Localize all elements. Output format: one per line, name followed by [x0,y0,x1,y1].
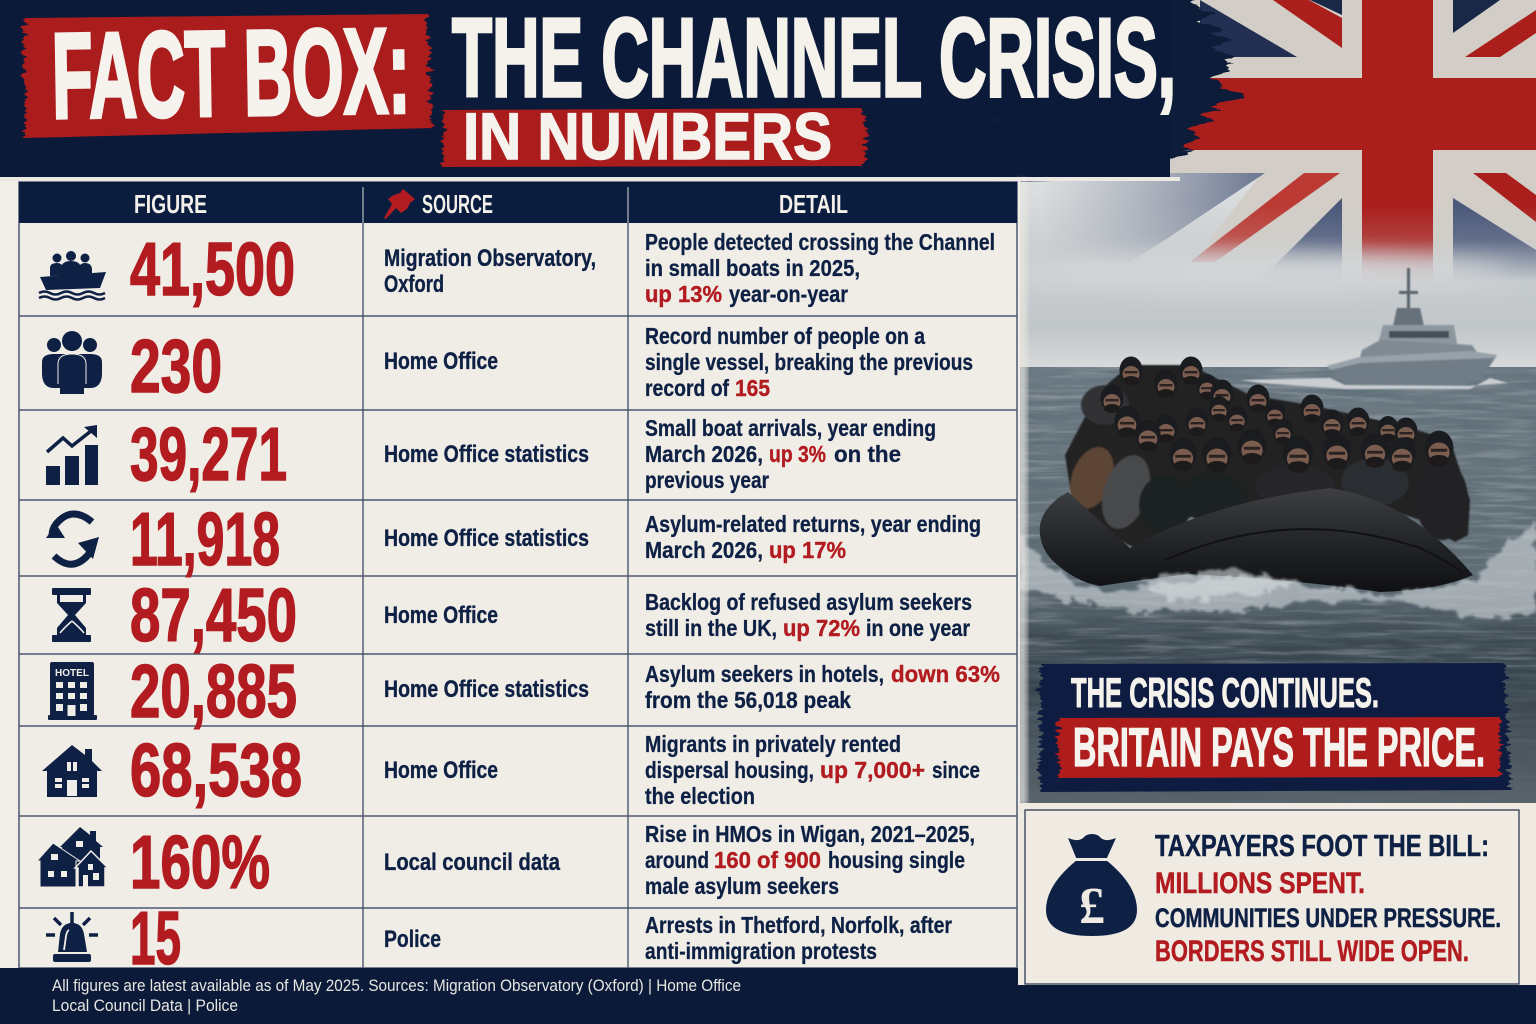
detail: Rise in HMOs in Wigan, 2021–2025, [645,821,975,847]
row: 11,918 [46,497,981,581]
left paper streak [1017,180,1027,805]
row: 20,885 [48,649,1000,733]
row: 160% [37,820,975,904]
detail: Record number of people on a [645,323,925,349]
detail: People detected crossing the Channel [645,229,995,255]
icon: money bag with pound sign [1046,834,1137,936]
detail: anti-immigration protests [645,938,877,964]
source: Home Office statistics [384,525,589,552]
FIGURE header: FIGURE [134,189,207,219]
row: 68,538 [42,728,980,812]
Union flag [1040,0,1536,290]
icon: money bag with pound sign: £ [1079,878,1105,935]
icon: cluster of houses [37,827,108,887]
figure: 68,538 [130,728,302,812]
figure: 15 [130,896,181,980]
source: Home Office [384,602,498,629]
detail: single vessel, breaking the previous [645,349,973,375]
icon: police siren [46,912,98,962]
source: Home Office statistics [384,441,589,468]
source: Local council data [384,849,561,876]
detail [645,731,980,809]
detail [645,589,972,641]
flag fade into sky [1018,205,1536,295]
panel: IN NUMBERS red brush [442,108,866,167]
detail: Small boat arrivals, year ending [645,415,936,441]
detail [645,229,995,307]
detail: previous year [645,467,769,493]
source: Police [384,926,441,953]
text: millions spent: MILLIONS SPENT. [1155,867,1365,900]
figure: 230 [130,324,222,408]
source: Migration Observatory, [384,245,596,272]
figure: 20,885 [130,649,297,733]
icon: house [42,745,102,797]
source [384,245,596,298]
row: 39,271 [46,412,936,496]
detail: year-on-year [729,281,848,307]
detail [645,415,936,493]
icon: people on boat [39,251,106,300]
detail [645,323,973,401]
icon: hotel building: HOTEL [55,668,89,679]
icon: group of people [42,331,102,394]
crowd bodies [1062,365,1470,548]
source: Home Office [384,348,498,375]
detail: record of [645,375,729,401]
detail [645,661,1000,713]
detail: up 3% [769,441,826,467]
source: Oxford [384,271,444,298]
footer note: All figures are latest available as of May 2025. Sources: Migration Observatory (Oxford) | Home Office [52,977,741,995]
row: 15 [46,896,952,980]
header band [23,0,1176,173]
figure: 11,918 [130,497,280,581]
sky [1018,170,1536,370]
detail: in small boats in 2025, [645,255,860,281]
detail: the election [645,783,755,809]
detail [645,821,975,899]
panel: FACT BOX red brush [23,14,432,138]
icon: hotel building [48,662,97,720]
icon: red pin [384,189,415,219]
detail: 160 of 900 [714,847,821,873]
callout red brush [1058,717,1500,778]
icon: returns cycle arrows [46,514,99,564]
detail: from the 56,018 peak [645,687,851,713]
detail: Backlog of refused asylum seekers [645,589,972,615]
photo: crowded inflatable dinghy [1017,180,1536,805]
torn navy edge over flag [1000,0,1232,182]
figure: 87,450 [130,573,297,657]
detail: down 63% [891,661,1000,687]
detail: in one year [866,615,970,641]
inflatable hull [1040,488,1473,592]
detail: around [645,847,709,873]
paper [0,177,1020,969]
detail: since [932,757,980,783]
footer note: Local Council Data | Police [52,997,238,1015]
table panel [0,177,1180,980]
detail: still in the UK, [645,615,777,641]
distant patrol ship [1240,268,1508,389]
table header row [19,182,1017,223]
source: Home Office [384,757,498,784]
detail: up 72% [783,615,860,641]
row: 87,450 [52,573,972,657]
callout navy brush [1040,663,1510,792]
panel: taxpayers foot the bill [1018,803,1536,1024]
figure: 41,500 [130,227,295,311]
detail: Migrants in privately rented [645,731,901,757]
detail: dispersal housing, [645,757,814,783]
detail: up 7,000+ [820,757,925,783]
panel: crisis continues callout [1040,663,1510,792]
heading: IN NUMBERS: IN NUMBERS [463,99,832,173]
row: 41,500 [39,227,995,311]
icon: hourglass [52,588,91,642]
detail: male asylum seekers [645,873,839,899]
detail: Asylum seekers in hotels, [645,661,884,687]
detail: up 17% [769,537,846,563]
detail: March 2026, [645,537,763,563]
detail: housing single [828,847,965,873]
SOURCE header: SOURCE [422,189,493,219]
detail: March 2026, [645,441,763,467]
row: 230 [42,323,973,408]
detail: Asylum-related returns, year ending [645,511,981,537]
figure: 39,271 [130,412,287,496]
detail: on the [834,441,901,467]
DETAIL header: DETAIL [779,189,848,219]
panel: photo and flag backdrop [990,0,1536,807]
heading: FACT BOX: FACT BOX: [51,2,411,144]
detail: 165 [735,375,770,401]
figure: 160% [130,820,270,904]
icon: rising bar chart [46,425,98,485]
bow spray and foam [1018,522,1536,618]
detail [645,511,981,563]
sea [1018,367,1536,807]
footer note [52,977,741,1015]
detail: Arrests in Thetford, Norfolk, after [645,912,952,938]
footer band [0,968,1020,1024]
source: Home Office statistics [384,676,589,703]
detail: up 13% [645,281,722,307]
detail [645,912,952,964]
heads [1100,356,1453,473]
